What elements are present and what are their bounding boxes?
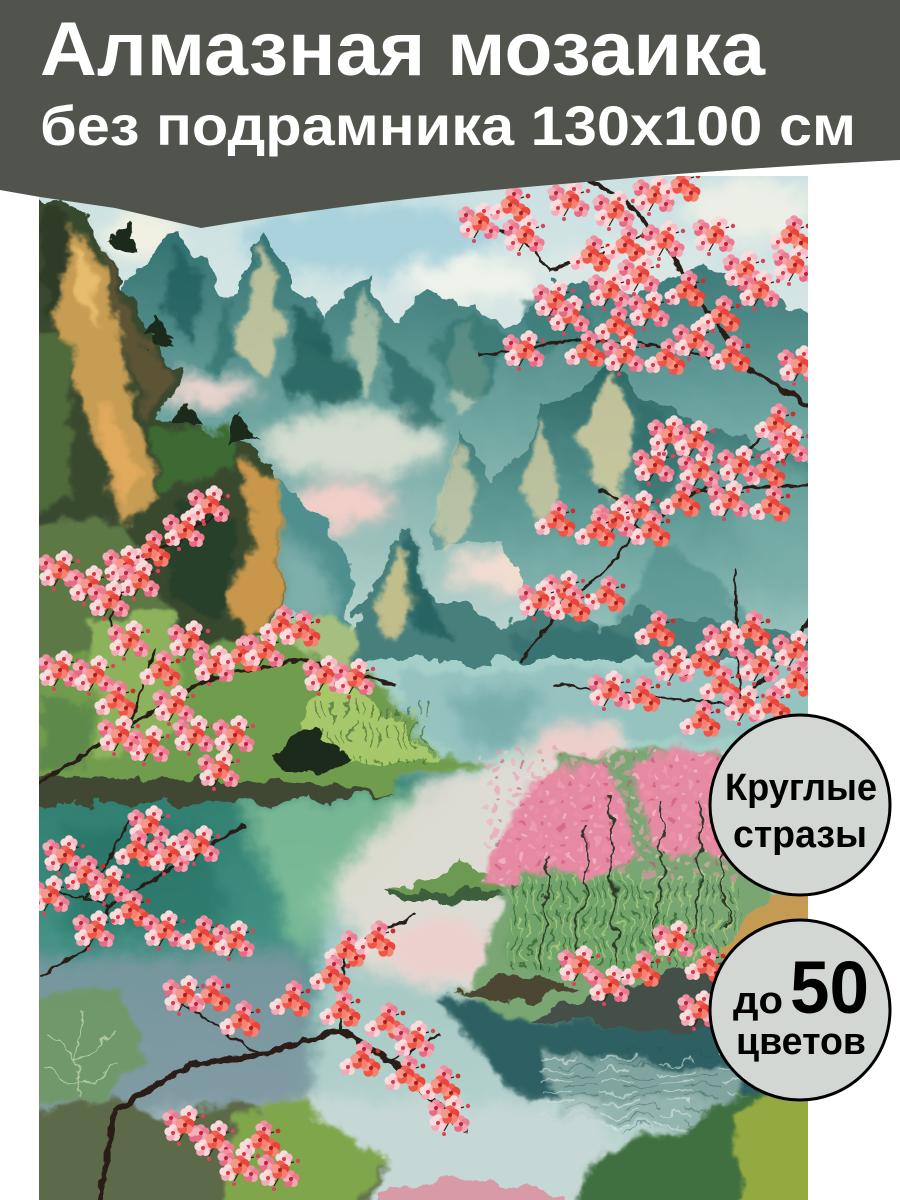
header banner xyxy=(0,0,900,228)
badge: up to 50 colours: до xyxy=(733,980,783,1022)
painting: mountain lake with blossoms xyxy=(39,176,808,1200)
blossoms: bottom centre xyxy=(162,920,470,1191)
title line 1: Алмазная мозаика xyxy=(40,7,766,92)
left cliff xyxy=(39,200,290,661)
middle mountains xyxy=(274,356,808,638)
blossoms: right bank xyxy=(557,920,725,1031)
title line 2: без подрамника 130х100 см xyxy=(40,94,856,157)
badge: up to 50 colours: 50 xyxy=(790,946,869,1029)
left shore with trees xyxy=(0,610,495,804)
branches xyxy=(40,180,808,1200)
title xyxy=(40,7,856,157)
blossoms: lower right xyxy=(587,610,815,737)
near mountains xyxy=(345,530,830,672)
badge: up to 50 colours: цветов xyxy=(736,1021,866,1063)
distant mountains xyxy=(125,225,830,660)
blossoms: lower left xyxy=(27,805,255,961)
badge: round rhinestones: Круглые xyxy=(725,767,877,809)
badge: round rhinestones: стразы xyxy=(733,814,867,856)
right bank with pink trees xyxy=(455,745,830,1035)
blossoms: middle right xyxy=(517,403,810,622)
painted landscape base xyxy=(39,176,808,1200)
badge: up to 50 colours xyxy=(710,920,890,1100)
bottom foliage xyxy=(0,985,830,1200)
water xyxy=(39,654,808,1200)
blossoms: top right xyxy=(457,165,820,386)
sky xyxy=(39,176,808,329)
clouds in valley xyxy=(155,377,570,592)
badge: round rhinestones xyxy=(710,715,890,895)
blossoms: left shore xyxy=(37,485,375,791)
